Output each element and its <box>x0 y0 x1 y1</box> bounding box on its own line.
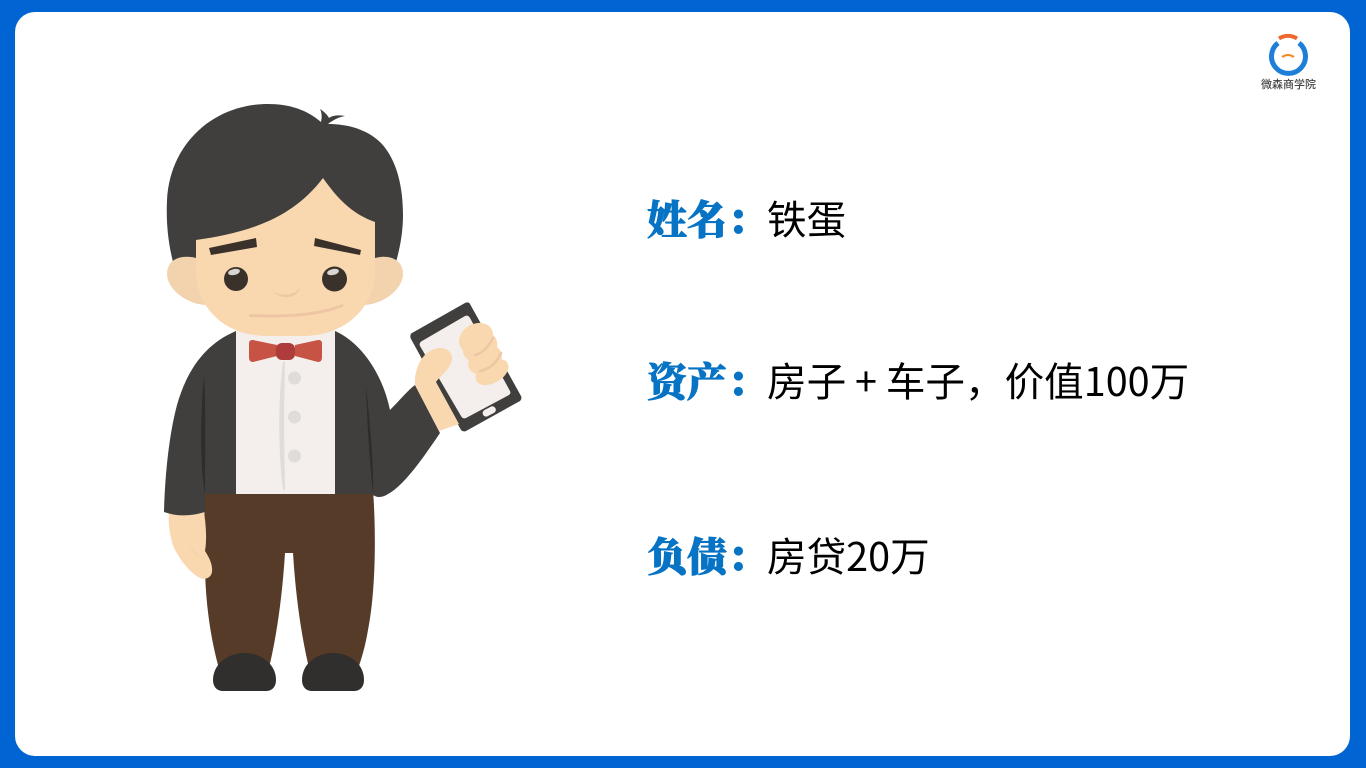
row: liabilities: 房贷20万 <box>767 526 930 583</box>
hair <box>167 104 403 262</box>
jacket <box>164 331 236 515</box>
logo text: 微森商学院 <box>1261 76 1316 92</box>
row: assets: 房子 + 车子，价值100万 <box>767 351 1189 408</box>
nose <box>272 288 300 297</box>
left hand <box>169 512 212 579</box>
bow tie <box>249 340 322 362</box>
right ear <box>364 257 403 305</box>
eyebrows <box>209 238 257 255</box>
phone hand <box>415 317 513 431</box>
shirt <box>236 325 335 494</box>
character illustration <box>164 104 521 691</box>
row: assets: 资产： <box>647 351 767 408</box>
right shoe <box>302 653 364 691</box>
shirt buttons <box>288 372 301 462</box>
row: liabilities: 负债： <box>647 526 767 583</box>
icon: logo ring <box>1271 36 1305 73</box>
trousers <box>204 490 375 672</box>
row: name: 姓名： <box>647 189 767 246</box>
row: liabilities <box>647 526 930 583</box>
row: name: 铁蛋 <box>767 189 846 246</box>
row: name <box>647 189 846 246</box>
phone <box>410 302 521 431</box>
face <box>196 178 375 336</box>
left shoe <box>213 653 276 691</box>
eyes <box>224 267 248 291</box>
left ear <box>167 257 206 305</box>
logo <box>1261 36 1316 92</box>
mouth <box>250 306 342 316</box>
